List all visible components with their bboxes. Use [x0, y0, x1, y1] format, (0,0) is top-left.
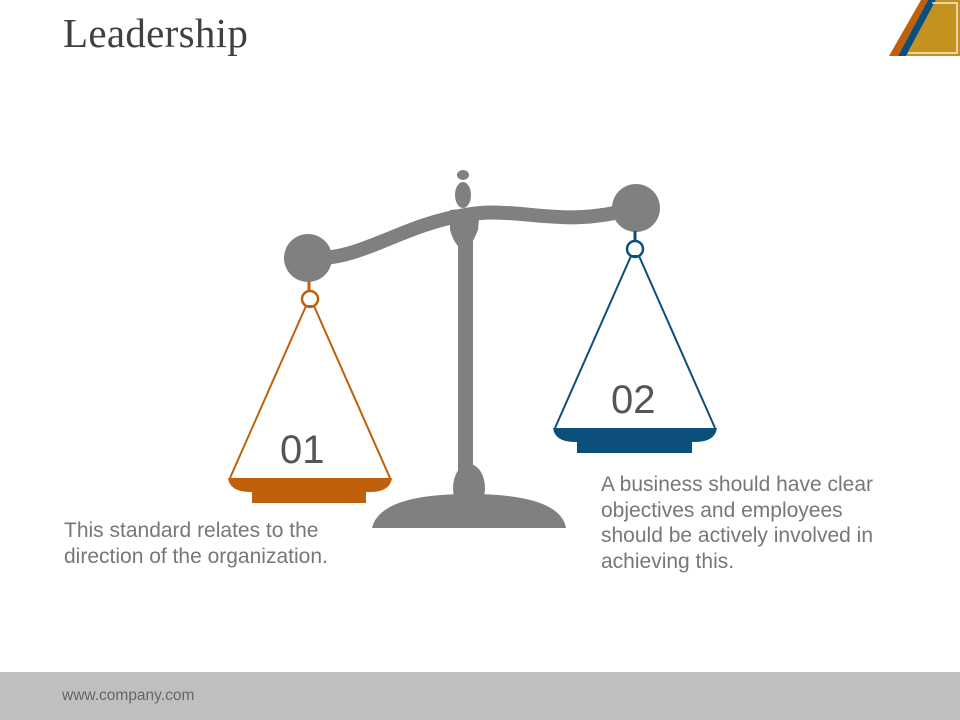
left pan: [228, 281, 392, 503]
footer url: www.company.com: [62, 687, 194, 704]
footer: [0, 672, 960, 720]
title: Leadership: [63, 10, 248, 56]
number 02: 02: [611, 378, 656, 422]
text left: This standard relates to the direction of the organization.: [64, 519, 328, 568]
right pan: [553, 231, 717, 453]
text right: A business should have clear objectives and employees should be actively involved in achieving this.: [601, 473, 873, 573]
number 01: 01: [280, 428, 324, 472]
logo: [889, 0, 960, 56]
beam: [284, 170, 660, 528]
